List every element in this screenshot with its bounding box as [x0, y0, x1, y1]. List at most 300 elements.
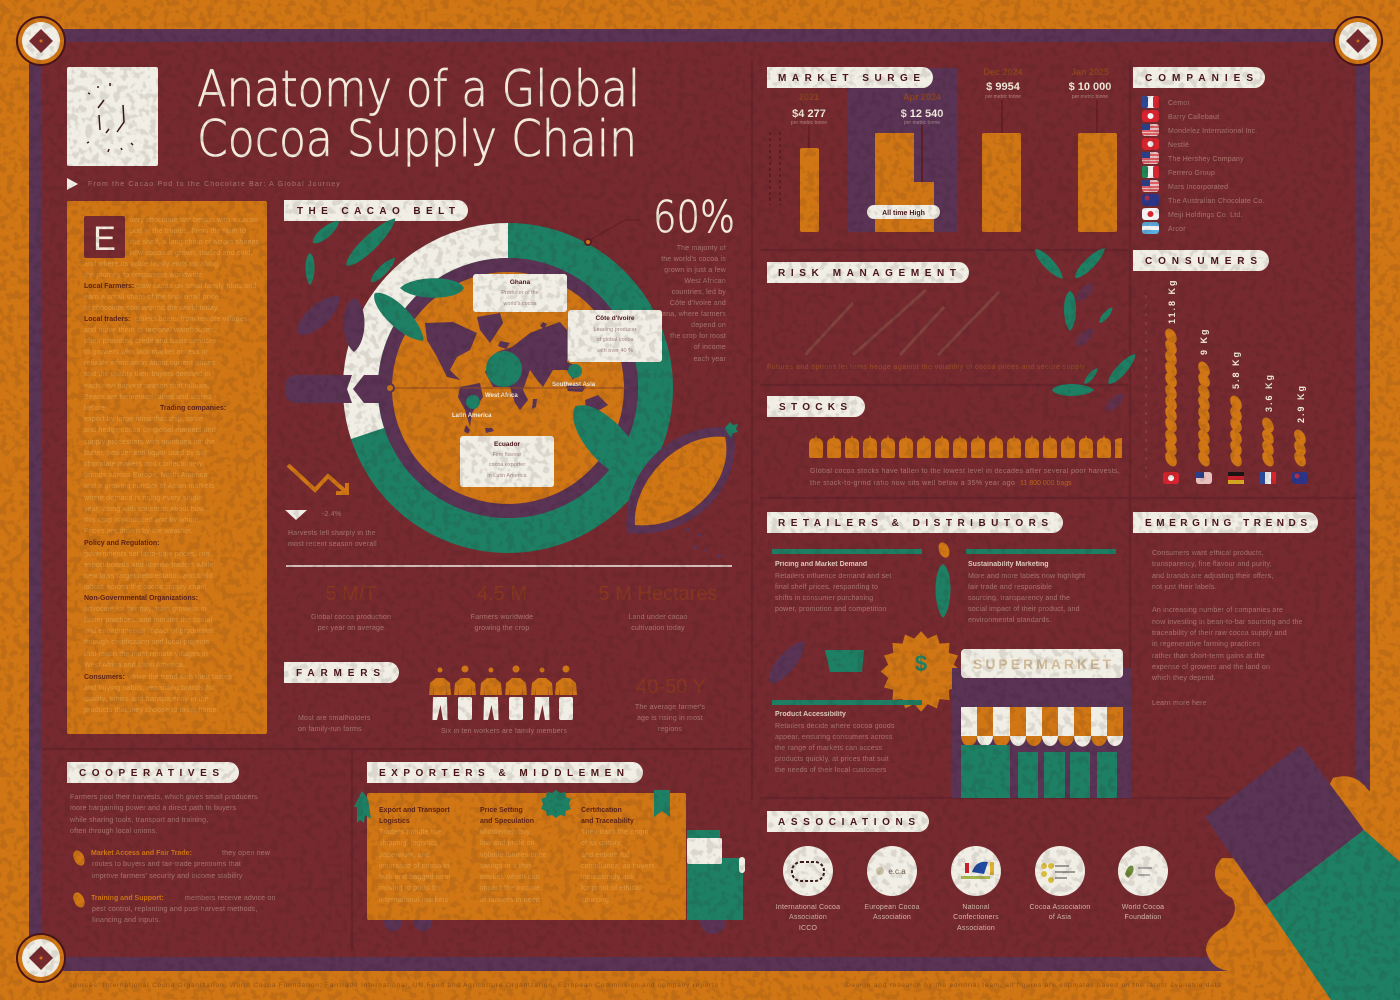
- text: cooperatives: often through local unions.: [70, 828, 158, 835]
- falling production note: -2.4%: [322, 511, 341, 518]
- introduction text: to growers who lack market access or: [84, 349, 209, 356]
- heading: farmers: FARMERS: [296, 668, 380, 679]
- bar 2021: $4 277: [792, 108, 826, 120]
- flag switzerland 2: [1142, 138, 1159, 150]
- column usa: 9 Kg: [1199, 327, 1209, 355]
- introduction text: year, along with concerns about how: [84, 506, 205, 513]
- corner pin top left: [16, 16, 66, 66]
- column usa: [1196, 327, 1212, 484]
- callout: cote d'ivoire: of global cocoa: [596, 337, 634, 343]
- introduction text: and buying habits, rewarding brands for: [84, 685, 215, 692]
- stat: farmers: growing the crop: [475, 625, 529, 632]
- introduction text: before: [84, 405, 105, 412]
- stat: tonnes: Global cocoa production: [311, 614, 391, 621]
- heading: consumers: [1133, 250, 1269, 271]
- falling production note: Harvests fell sharply in the: [288, 530, 376, 537]
- title: [197, 60, 640, 168]
- text block: pricing: Retailers influence demand and set: [775, 573, 892, 580]
- heading: stocks: [767, 396, 865, 417]
- heading: exporters and middlemen: EXPORTERS & MIDDLEMEN: [379, 768, 624, 779]
- illustration: purple leaf and green package: [763, 636, 864, 688]
- text block: pricing: Pricing and Market Demand: [775, 561, 867, 568]
- introduction text: and hedge cocoa on global markets and: [84, 427, 216, 434]
- text: 60 percent note: Côte d'Ivoire and: [670, 300, 726, 307]
- bullet: training: financing and inputs.: [92, 917, 160, 924]
- introduction subheadings: Trading companies:: [160, 405, 226, 412]
- introduction text: West Africa and Latin America.: [84, 662, 185, 669]
- flag italy: [1142, 166, 1159, 178]
- bullet: training: members receive advice on: [185, 895, 276, 902]
- bar 2021: per metric tonne: [791, 120, 827, 126]
- text: farmers note: on family-run farms: [298, 726, 362, 733]
- truck column: export: [379, 807, 451, 904]
- heading: risk management: RISK MANAGEMENT: [778, 268, 956, 279]
- leaves top left of belt: [291, 213, 464, 352]
- chart axis: [770, 132, 780, 205]
- green map circles: [466, 351, 582, 409]
- truck column: export: insurance of cocoa in: [379, 863, 449, 870]
- map labels: Southeast Asia: [552, 382, 596, 388]
- stat: farmers: [471, 583, 533, 632]
- association: european: e.c.a: [888, 867, 906, 876]
- text block: sustainability: fair trade and responsible: [968, 584, 1052, 591]
- introduction text: reliable information about current prices: [84, 360, 215, 367]
- flag usa 2: [1142, 152, 1159, 164]
- text: stocks: Global cocoa stocks have fallen to the lowest level in decades after several poor harvests,: [810, 468, 1120, 475]
- truck column: traceability: [581, 807, 655, 904]
- association: icco: International Cocoa: [776, 904, 840, 911]
- text block: sustainability: More and more labels now highlight: [968, 573, 1085, 580]
- introduction text: where demand is rising every single: [83, 495, 202, 502]
- corner pin top right: [1333, 16, 1383, 66]
- truck column: export: moving to ports for: [379, 885, 441, 892]
- column australia: 2.9 Kg: [1296, 384, 1306, 423]
- heading: stocks: STOCKS: [779, 402, 847, 413]
- association: world cocoa foundation: World Cocoa: [1122, 904, 1164, 911]
- text block: sustainability: sourcing, transparency and the: [968, 595, 1070, 602]
- text: cooperatives: more bargaining power and a direct path to buyers: [70, 805, 237, 812]
- company names: Barry Callebaut: [1168, 114, 1219, 121]
- text: emerging trends: rather than short-term gains at the: [1152, 653, 1265, 660]
- text block: sustainability: Sustainability Marketing: [968, 561, 1049, 568]
- truck illustration: [354, 790, 745, 934]
- falling production note: [285, 510, 377, 548]
- introduction text: this crop is produced and by whom.: [84, 517, 201, 524]
- company names: The Australian Chocolate Co.: [1168, 198, 1265, 205]
- callout: ecuador: in Latin America: [487, 473, 528, 479]
- leaves: risk cluster: [1032, 244, 1139, 414]
- text block: pricing: shifts in consumer purchasing: [775, 595, 873, 602]
- callout: ghana: Ghana: [510, 279, 530, 286]
- bullet: market access: Market Access and Fair Trade:: [91, 850, 192, 857]
- stat: hectares: Land under cacao: [628, 614, 688, 621]
- introduction text: pod in the tropics. From the farm to: [130, 228, 246, 235]
- text: emerging trends: transparency, fine flavour and purity,: [1152, 561, 1272, 568]
- column switzerland: [1163, 278, 1179, 484]
- truck column: price: Middlemen buy: [480, 829, 530, 836]
- heading: associations: ASSOCIATIONS: [778, 817, 915, 828]
- bar 2025: Jan 2025: [1071, 67, 1109, 77]
- pictogram: farmers: [429, 666, 577, 720]
- text block: product accessibility: the needs of their local customers: [775, 767, 887, 774]
- callout: cote d'ivoire: with over 40 %: [596, 348, 633, 354]
- text: emerging trends: An increasing number of companies are: [1152, 607, 1283, 614]
- stat: hectares: [599, 583, 717, 632]
- flag usa 3: [1142, 180, 1159, 192]
- bullet: training: pest control, replanting and post-harvest methods,: [92, 906, 258, 913]
- company names: Arcor: [1168, 226, 1186, 233]
- association: cocoa association of asia: [1030, 846, 1090, 921]
- drop cap E: E: [93, 220, 116, 258]
- logo box: [67, 67, 158, 166]
- introduction text: quality, ethics and transparency in the: [84, 696, 209, 703]
- introduction text: better practices, and monitor the social: [84, 617, 212, 624]
- truck column: export: paperwork, and: [379, 852, 430, 859]
- stat: 60 percent: 60%: [653, 192, 735, 243]
- introduction subheadings: Local traders:: [84, 316, 130, 323]
- stat: hectares: cultivation today: [631, 625, 685, 632]
- introduction text: Beans are fermented, dried and sorted: [84, 394, 211, 401]
- callout: cote d'ivoire: Leading producer: [594, 327, 637, 333]
- stat: farmer age: age is rising in most: [637, 715, 703, 722]
- association: national confectioners: National: [962, 904, 990, 911]
- association: european: Association: [873, 914, 911, 921]
- flag france: [1142, 96, 1159, 108]
- introduction text: and move them to regional warehouses,: [84, 327, 216, 334]
- callout: cote d'ivoire: Côte d'Ivoire: [595, 315, 635, 322]
- purple wrapper: [1205, 745, 1364, 905]
- heading: exporters and middlemen: [367, 762, 643, 783]
- bar record high: [867, 92, 943, 232]
- bar 2024: [982, 67, 1023, 232]
- truck column: traceability: They track the origin: [581, 829, 649, 836]
- text: emerging trends: in regenerative farming practices: [1152, 641, 1260, 648]
- column france: 3.6 Kg: [1264, 373, 1274, 412]
- stat: hectares: 5 M Hectares: [599, 583, 717, 605]
- highlight column: [848, 68, 958, 232]
- subtitle: From the Cacao Pod to the Chocolate Bar: A Global Journey: [88, 181, 340, 188]
- illustration: store: [952, 649, 1132, 798]
- footer text right: Design and research by the editorial team, all figures are estimates based on the latest available data: [846, 982, 1221, 989]
- text: emerging trends: Learn more here: [1152, 700, 1207, 707]
- title: Cocoa Supply Chain: [197, 110, 637, 168]
- bullet: training: [71, 891, 276, 924]
- truck column: traceability: for proof of ethical: [581, 885, 641, 892]
- callout: cote d'ivoire: [568, 310, 662, 362]
- association: world cocoa foundation: Foundation: [1124, 914, 1162, 921]
- association: national confectioners: Association: [957, 925, 995, 932]
- callout: ghana: world's cocoa: [502, 301, 538, 307]
- bar 2025: $ 10 000: [1069, 81, 1111, 93]
- chart: consumer beans: [1146, 278, 1308, 484]
- text: 60 percent note: the world's cocoa is: [661, 256, 726, 263]
- stat: farmers: 4.5 M: [477, 583, 527, 605]
- introduction text: the shelf, a long chain of actors shapes: [130, 239, 260, 246]
- world map: [425, 313, 608, 434]
- bar 2024: per metric tonne: [985, 94, 1021, 100]
- text: 60 percent note: Ghana, where farmers: [652, 311, 726, 318]
- map labels: Latin America: [452, 413, 492, 419]
- stat: tonnes: per year on average: [318, 625, 384, 632]
- truck column: price: volatile futures price: [480, 852, 547, 859]
- truck column: price: low and profit on: [480, 840, 535, 847]
- introduction subheadings: Consumers:: [84, 674, 125, 681]
- callout: ghana: Producer of the: [501, 290, 539, 296]
- store awning: [961, 707, 1123, 747]
- truck column: traceability: and ensure full: [581, 852, 630, 859]
- company names: Mars Incorporated: [1168, 184, 1228, 191]
- introduction text: that reach the most remote villages in: [84, 651, 208, 658]
- cream share of ring: [343, 223, 508, 439]
- orange globe: [392, 272, 624, 504]
- text: 60 percent note: countries, led by: [672, 289, 726, 296]
- introduction subheadings: Local Farmers:: [84, 283, 134, 290]
- heading: companies: COMPANIES: [1145, 73, 1253, 84]
- zigzag down arrow: [288, 465, 347, 493]
- bar 2024: Dec 2024: [983, 67, 1023, 77]
- heading: risk management: [767, 262, 969, 283]
- introduction text: the journey to consumers worldwide.: [84, 272, 205, 279]
- text: emerging trends: expense of growers and the land on: [1152, 664, 1270, 671]
- arrow tag on belt: [285, 375, 394, 403]
- stat: farmer age: regions: [658, 726, 682, 733]
- text: cooperatives: Farmers pool their harvests, which gives small producers: [70, 794, 258, 801]
- heading: companies: [1133, 67, 1265, 88]
- store sign: SUPERMARKET: [973, 656, 1111, 672]
- bar record high: $ 12 540: [901, 108, 943, 120]
- text: emerging trends: and brands are adjusting their offers,: [1152, 573, 1274, 580]
- store door and windows: [961, 745, 1117, 798]
- association: cocoa association of asia: Cocoa Association: [1030, 904, 1090, 911]
- cacao pod: [626, 422, 738, 558]
- heading: associations: [767, 811, 929, 832]
- text: farmers note: Most are smallholders: [298, 715, 371, 722]
- introduction text: labour across the cocoa supply chain.: [84, 584, 209, 591]
- truck column: export: Logistics: [379, 818, 410, 825]
- bar 2025: per metric tonne: [1072, 94, 1108, 100]
- bullet: market access: [71, 849, 271, 880]
- falling production note: most recent season overall: [288, 541, 377, 548]
- callout: ecuador: cocoa exporter: [489, 462, 525, 468]
- stat: farmer age: 40-50 Y: [636, 676, 706, 698]
- leaves: retailers divider: [936, 541, 952, 618]
- truck column: price: and Speculation: [480, 818, 534, 825]
- map labels: [452, 382, 596, 419]
- heading: retailers and distributors: RETAILERS & DISTRIBUTORS: [778, 518, 1048, 529]
- text block: sustainability: [966, 549, 1116, 624]
- company names: Ferrero Group: [1168, 170, 1215, 177]
- company names: Cémoi: [1168, 100, 1189, 107]
- flag usa: [1142, 124, 1159, 136]
- stat: farmers: Farmers worldwide: [471, 614, 533, 621]
- badge: dollar star: [881, 631, 961, 712]
- list: companies: [1142, 96, 1265, 234]
- introduction text: often providing credit and basic services: [84, 338, 217, 345]
- introduction text: advocate for fair pay, train growers in: [84, 606, 206, 613]
- corner pin bottom left: [16, 933, 66, 983]
- title: Anatomy of a Global: [197, 60, 640, 118]
- green wrapper: [1266, 830, 1400, 1000]
- column switzerland: 11.8 Kg: [1167, 278, 1177, 324]
- introduction text: Prices are driven by the weather.: [84, 528, 193, 535]
- heading: cooperatives: [67, 762, 239, 783]
- text: emerging trends: not just their labels.: [1152, 584, 1217, 591]
- bullet: training: Training and Support:: [91, 895, 164, 902]
- text: 60 percent note: grown in just a few: [664, 267, 727, 274]
- chart: risk management slanted lines: [805, 290, 999, 355]
- heading: market surge: MARKET SURGE: [778, 73, 920, 84]
- callout: ghana: [473, 274, 567, 312]
- text: emerging trends: Consumers want ethical products,: [1152, 550, 1264, 557]
- chart: stock barrels: [809, 435, 1122, 458]
- introduction text: governments set farm-gate prices, run: [84, 551, 210, 558]
- bar record high: Apr 2024: [903, 92, 941, 102]
- callout: ecuador: Ecuador: [494, 441, 520, 448]
- panel: introduction: [67, 201, 267, 734]
- truck column: price: [480, 807, 547, 904]
- truck column: traceability: increasingly ask: [581, 874, 634, 881]
- bar 2024: $ 9954: [986, 81, 1021, 93]
- introduction text: earn a small share of the final retail price: [84, 294, 219, 301]
- heading: consumers: CONSUMERS: [1145, 256, 1257, 267]
- truck container: [367, 793, 686, 920]
- purple inner ring: [378, 258, 638, 518]
- introduction text: chocolate makers and confectionery: [84, 461, 203, 468]
- truck column: price: Price Setting: [480, 807, 523, 814]
- truck wheels: [384, 908, 726, 934]
- heading: market surge: [767, 67, 933, 88]
- introduction text: butter, powder and liquor used by big: [84, 450, 206, 457]
- heading: emerging trends: EMERGING TRENDS: [1145, 518, 1307, 529]
- chart: market surge: [770, 67, 1117, 232]
- column france: [1260, 373, 1276, 484]
- introduction text: brands across Europe, North America: [84, 472, 208, 479]
- text: stocks: [810, 468, 1120, 487]
- text: cooperatives: while sharing tools, transport and training,: [69, 817, 208, 824]
- badge: dollar star: $: [915, 651, 927, 676]
- text: emerging trends: which they depend.: [1151, 675, 1216, 682]
- truck cab: [687, 830, 745, 920]
- drop cap E: [84, 216, 125, 258]
- introduction text: and environmental impact of production: [84, 628, 214, 635]
- callout: ecuador: Fine flavour: [493, 452, 522, 458]
- text block: product accessibility: Retailers decide where cocoa goods: [775, 723, 895, 730]
- bullet: market access: improve farmers' security and income stability: [92, 873, 243, 880]
- truck column: export: bulk and bagged form: [379, 874, 451, 881]
- column germany: [1228, 350, 1244, 484]
- callout: ecuador: [460, 436, 554, 487]
- introduction text: through certification and local projects: [84, 639, 210, 646]
- bar 2025: [1069, 67, 1117, 232]
- text block: sustainability: social impact of their product, and: [968, 606, 1080, 613]
- bullet: market access: routes to buyers and fair-trade premiums that: [92, 861, 241, 868]
- introduction text: grow cacao on small family plots and: [135, 283, 257, 290]
- stat: 60 percent: [585, 192, 735, 245]
- introduction text: collect beans from remote villages: [135, 316, 248, 323]
- text: stocks: 11 800 000 bags: [1020, 480, 1072, 487]
- introduction subheadings: Non-Governmental Organizations:: [84, 595, 198, 602]
- bar record high: All time High: [882, 210, 925, 217]
- company names: The Hershey Company: [1168, 156, 1244, 163]
- text: risk management: Futures and options let firms hedge against the volatility of cocoa prices and secure supply: [767, 364, 1086, 371]
- introduction text: how cocoa is grown, traded and sold,: [130, 250, 253, 257]
- heading: cooperatives: COOPERATIVES: [79, 768, 219, 779]
- introduction text: of chocolate sold around the world today.: [84, 305, 219, 312]
- introduction text: products that they choose to bring home.: [84, 707, 219, 714]
- truck column: export: shipping, logistics: [379, 840, 438, 847]
- text block: product accessibility: Product Accessibility: [775, 711, 846, 718]
- introduction text: and the quality their buyers demand in: [84, 371, 210, 378]
- bar 2021: 2021: [799, 92, 819, 102]
- company names: Nestlé: [1168, 142, 1189, 149]
- truck badges: [354, 790, 670, 823]
- introduction text: and where its value finally ends up along: [84, 261, 218, 268]
- flag japan: [1142, 208, 1159, 220]
- column germany: 5.8 Kg: [1231, 350, 1241, 389]
- text block: product accessibility: [772, 700, 922, 774]
- flag argentina: [1142, 222, 1159, 234]
- truck column: traceability: sourcing: [581, 897, 609, 904]
- introduction text: export by large firms that ship, store: [84, 416, 203, 423]
- bullet: market access: they open new: [222, 850, 271, 857]
- text block: product accessibility: the range of markets can access: [775, 745, 883, 752]
- truck column: price: swings in a thin: [480, 863, 531, 870]
- association: national confectioners: Confectioners: [953, 914, 999, 921]
- heading: the cacao belt: [284, 200, 468, 221]
- flag australia: [1142, 194, 1159, 206]
- introduction subheadings: Policy and Regulation:: [84, 540, 159, 547]
- flag switzerland: [1142, 110, 1159, 122]
- text: emerging trends: now investing in bean-to-bar sourcing and the: [1152, 619, 1303, 626]
- introduction text: drive the trend with their tastes: [130, 674, 232, 681]
- text block: product accessibility: products quickly, at prices that suit: [775, 756, 889, 763]
- text: farmer caption: Six in ten workers are family members: [441, 728, 567, 735]
- heading: emerging trends: [1133, 512, 1318, 533]
- introduction text: new laws target deforestation and child: [84, 573, 213, 580]
- heading: farmers: [284, 662, 399, 683]
- company names: Mondelez International Inc.: [1168, 128, 1257, 135]
- truck column: price: impact the income: [480, 885, 540, 892]
- introduction text: and a growing number of Asian markets: [84, 483, 215, 490]
- large green leaf: [561, 393, 659, 497]
- text: 60 percent note: the crop for most: [670, 333, 726, 340]
- truck column: price: of farmers in need: [480, 897, 540, 904]
- bar record high: per metric tonne: [904, 120, 940, 126]
- text: 60 percent note: depend on: [691, 322, 726, 329]
- introduction text: export boards and license traders while: [84, 562, 214, 569]
- heading: the cacao belt: THE CACAO BELT: [297, 206, 455, 217]
- column australia: [1292, 384, 1308, 484]
- map labels: West Africa: [485, 393, 518, 399]
- text: 60 percent note: The majority of: [677, 245, 726, 252]
- introduction text: very chocolate bar begins with a cacao: [130, 217, 258, 224]
- heading: retailers and distributors: [767, 512, 1063, 533]
- text: 60 percent note: each year: [693, 356, 726, 363]
- company names: Meiji Holdings Co. Ltd.: [1168, 212, 1243, 219]
- bar 2021: [791, 92, 827, 232]
- text: 60 percent note: of income: [694, 344, 726, 351]
- stat: tonnes: 5 M/T: [325, 583, 377, 605]
- association: national confectioners: [951, 846, 1001, 932]
- association: icco: Association: [789, 914, 827, 921]
- association: world cocoa foundation: [1118, 846, 1168, 921]
- stat: tonnes: [311, 583, 391, 632]
- introduction text: supply processors with grindings for the: [84, 439, 215, 446]
- introduction text: each new harvest season that follows.: [84, 383, 210, 390]
- text: emerging trends: traceability of their raw cocoa supply and: [1152, 630, 1287, 637]
- text: stocks: the stock-to-grind ratio now sits well below a 35% year ago: [810, 480, 1015, 487]
- text block: pricing: final shelf prices, responding to: [775, 584, 878, 591]
